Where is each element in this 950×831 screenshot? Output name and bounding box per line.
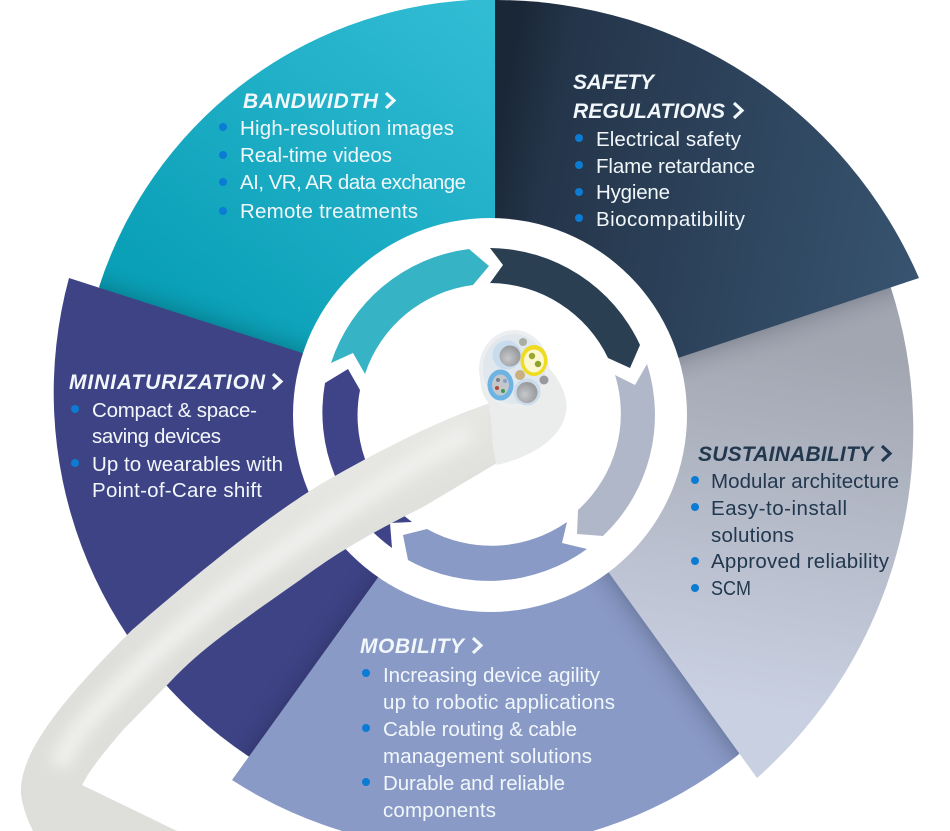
heading: safety regulations [573, 71, 725, 123]
lumen: bottom [514, 378, 540, 406]
list: miniaturization items [71, 399, 283, 502]
list: safety items: Flame retardance [596, 155, 755, 178]
list: bandwidth items: AI, VR, AR data exchange [240, 171, 466, 194]
list: mobility items: Cable routing & cable [383, 718, 577, 741]
list: sustainability items: solutions [711, 524, 794, 547]
list: miniaturization items: saving devices [92, 425, 221, 448]
cable end face [479, 330, 549, 408]
list: safety items: Electrical safety [596, 128, 742, 151]
core: yellow pair [520, 345, 548, 376]
panel: bandwidth [99, 0, 500, 354]
list: bandwidth items: Real-time videos [240, 144, 392, 167]
list: sustainability items: SCM [711, 577, 751, 600]
list: mobility items: components [383, 799, 496, 822]
panel: miniaturization [54, 278, 378, 756]
list: mobility items: Increasing device agility [383, 664, 601, 687]
arrow: safety [490, 248, 640, 368]
list: mobility items: up to robotic applications [383, 691, 615, 714]
panel: mobility [232, 572, 740, 831]
icon: bandwidth chevron [386, 93, 394, 108]
panel: sustainability [608, 288, 914, 778]
heading: mobility: MOBILITY [360, 635, 466, 658]
cycle arrows [322, 248, 655, 581]
cable highlight [58, 432, 470, 766]
heading: sustainability: SUSTAINABILITY [698, 443, 875, 466]
list: sustainability items [691, 470, 899, 600]
heading: bandwidth: BANDWIDTH [243, 90, 379, 113]
list: sustainability items: Approved reliability [711, 550, 890, 573]
cable head [480, 368, 567, 465]
arrow: sustainability [577, 364, 655, 536]
heading: miniaturization: MINIATURIZATION [69, 371, 266, 394]
list: safety items: Biocompatibility [596, 208, 746, 231]
heading: safety regulations: REGULATIONS [573, 100, 725, 123]
heading: safety regulations: SAFETY [573, 71, 656, 94]
arrow: mobility [403, 522, 587, 581]
icon: sustainability chevron [882, 446, 890, 461]
list: miniaturization items: Up to wearables with [92, 453, 283, 476]
white centre disc [293, 218, 687, 612]
list: mobility items: management solutions [383, 745, 592, 768]
core: blue bundle [488, 370, 514, 400]
list: safety items: Hygiene [596, 181, 670, 204]
small wires [515, 338, 548, 384]
list: miniaturization items: Point-of-Care shift [92, 479, 262, 502]
arrow: bandwidth [331, 249, 489, 374]
icon: mobility chevron [473, 638, 481, 653]
list: bandwidth items: Remote treatments [240, 200, 418, 223]
list: mobility items: Durable and reliable [383, 772, 565, 795]
list: sustainability items: Easy-to-install [711, 497, 847, 520]
photo: cable [21, 330, 567, 831]
list: miniaturization items: Compact & space- [92, 399, 257, 422]
lumen: top [492, 340, 522, 370]
icon: safety chevron [734, 103, 742, 118]
cable body [21, 403, 497, 831]
arrow: miniaturization [322, 369, 412, 548]
panel: safety regulations [495, 0, 919, 415]
list: safety items [575, 128, 755, 231]
list: bandwidth items [219, 117, 466, 223]
icon: miniaturization chevron [273, 374, 281, 389]
list: sustainability items: Modular architecture [711, 470, 899, 493]
list: bandwidth items: High-resolution images [240, 117, 454, 140]
list: mobility items [362, 664, 615, 822]
